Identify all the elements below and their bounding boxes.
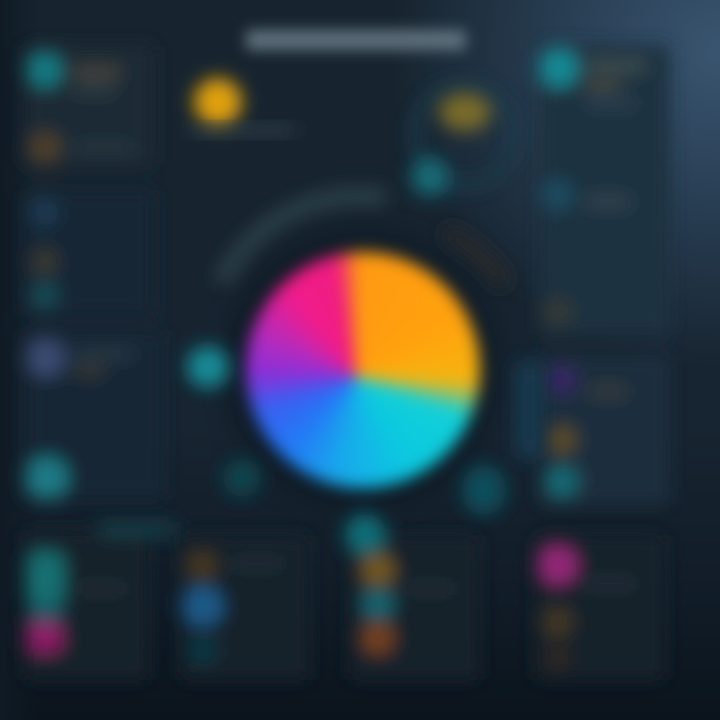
title: [246, 30, 466, 50]
satellite nodes around chart: [187, 346, 542, 515]
panel: top centre left icon: [190, 78, 295, 134]
panel: top centre right gauge: [411, 85, 515, 196]
panel: bottom row: [24, 514, 665, 680]
decorative arc around chart: [222, 196, 505, 285]
chart halo: [226, 232, 498, 508]
panel: right column: [540, 45, 670, 505]
pie chart: [246, 252, 480, 488]
panel: left column: [24, 45, 164, 500]
